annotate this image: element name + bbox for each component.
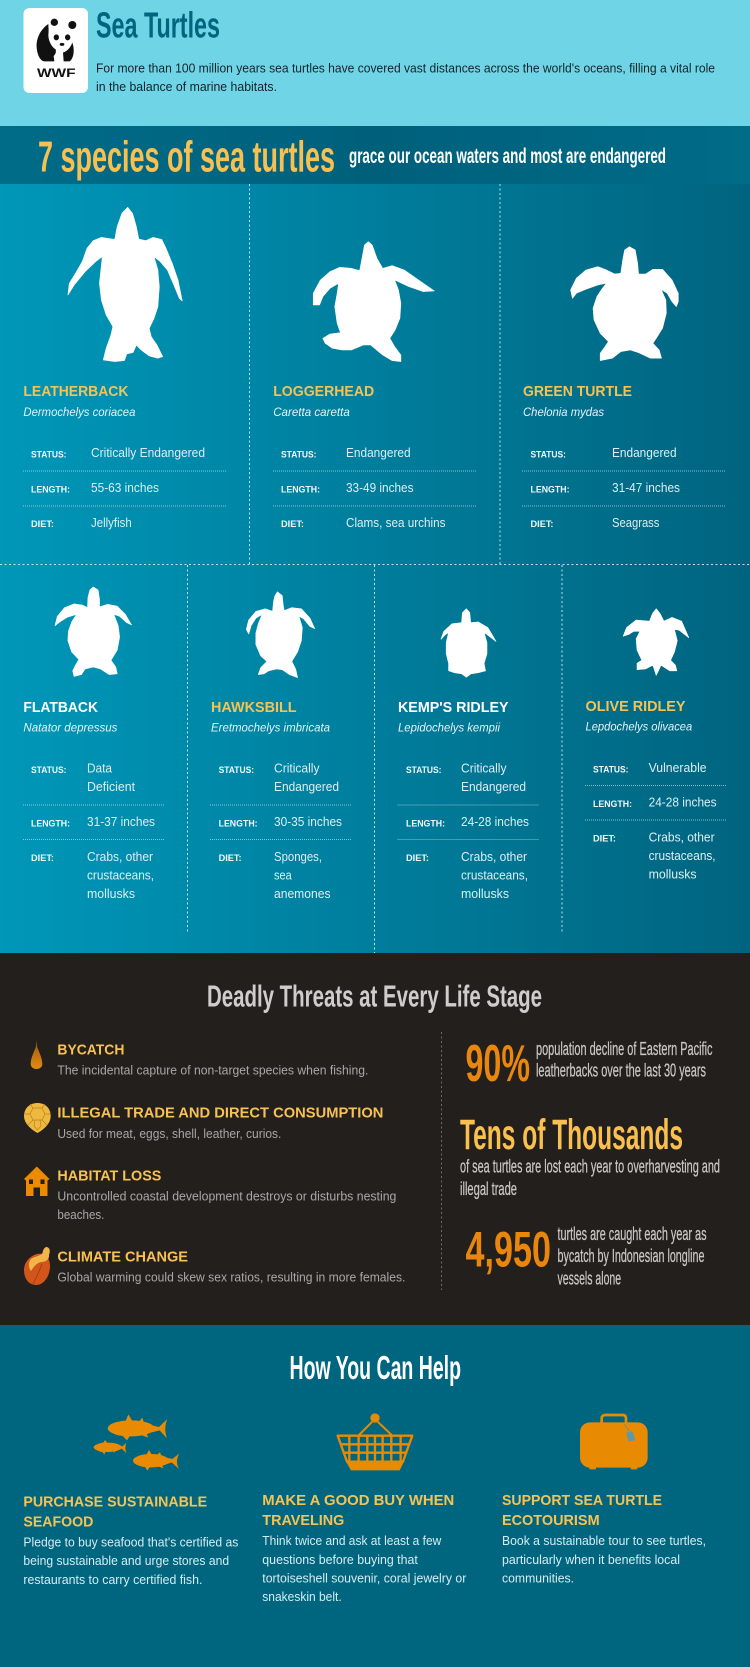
panel: olive ridley: OLIVE RIDLEY [586,698,686,715]
panel: hawksbill: STATUS: [219,765,254,776]
panel: leatherback: STATUS: [31,450,66,460]
panel: green turtle: Endangered [612,445,677,460]
panel: hawksbill: DIET: [219,853,242,864]
panel: hawksbill: Sponges, [274,849,322,864]
panel: olive ridley: Vulnerable [649,760,707,775]
panel: kemp's ridley: 24-28 inches [461,814,529,829]
intro text: in the balance of marine habitats. [96,79,277,94]
panel: leatherback: LEATHERBACK [23,383,129,400]
panel: header [0,0,750,126]
icon: green turtle silhouette [571,247,678,361]
panel: kemp's ridley: KEMP'S RIDLEY [398,699,508,716]
panel: leatherback: Dermochelys coriacea [23,405,136,419]
panel: green turtle: STATUS: [530,450,566,460]
stat: 90 percent: 90% [466,1035,530,1093]
panel: flatback: STATUS: [31,765,66,776]
intro text [96,60,715,94]
panel: loggerhead [273,242,476,530]
icon: net [31,1040,42,1069]
help: ecotourism: ECOTOURISM [502,1512,600,1529]
panel: hawksbill: anemones [274,886,331,901]
threat: habitat loss: Uncontrolled coastal development destroys or disturbs nesting [57,1190,396,1204]
panel: hawksbill: LENGTH: [219,818,258,830]
icon: WWF panda logo [24,8,88,93]
icon: fish [94,1414,179,1470]
heading: deadly threats: Deadly Threats at Every Life Stage [207,978,542,1014]
panel: loggerhead: Clams, sea urchins [346,515,446,530]
threat: illegal trade [24,1103,383,1141]
help: good buy: tortoiseshell souvenir, coral jewelry or [262,1571,467,1586]
panel: olive ridley [585,609,727,882]
panel: flatback: LENGTH: [31,818,70,830]
icon: loggerhead silhouette [313,242,434,362]
help: good buy [262,1413,467,1604]
panel: species background [0,184,750,953]
panel: hawksbill: sea [274,868,292,882]
stat: 90 percent [466,1035,712,1093]
threat: illegal trade: Used for meat, eggs, shell, leather, curios. [57,1127,281,1141]
panel: flatback: Natator depressus [23,720,117,734]
panel: green turtle [522,247,726,530]
panel: olive ridley: mollusks [649,866,697,882]
help: ecotourism [502,1415,706,1586]
panel: hawksbill [210,592,351,901]
icon: warming egg [24,1247,50,1285]
threat: climate change [24,1247,405,1285]
panel: hawksbill: Critically [274,760,320,776]
threat: climate change: CLIMATE CHANGE [57,1248,188,1266]
panel: deadly threats [0,953,750,1325]
icon: hawksbill silhouette [246,592,315,678]
threat: bycatch [31,1040,368,1078]
panel: olive ridley: crustaceans, [649,848,716,863]
panel: kemp's ridley: crustaceans, [461,868,528,882]
threat: illegal trade: ILLEGAL TRADE AND DIRECT CONSUMPTION [57,1104,383,1122]
stat: 4,950 [466,1222,706,1288]
panel: green turtle: LENGTH: [530,484,570,496]
panel: green turtle: GREEN TURTLE [523,383,632,400]
help: ecotourism: communities. [502,1571,574,1586]
panel: flatback: FLATBACK [23,699,98,716]
stat: 4,950: 4,950 [466,1222,551,1278]
icon: turtle shell [24,1103,51,1133]
panel: leatherback: Jellyfish [91,515,132,530]
title: Sea Turtles [96,4,220,46]
panel: kemp's ridley: Endangered [461,779,526,794]
panel: olive ridley: Lepdochelys olivacea [586,720,692,734]
panel: flatback: mollusks [87,886,135,901]
panel: kemp's ridley: LENGTH: [406,818,445,830]
panel: green turtle: DIET: [530,519,554,530]
help: good buy: MAKE A GOOD BUY WHEN [262,1492,454,1509]
panel: kemp's ridley: Crabs, other [461,849,528,864]
panel: flatback [23,587,164,901]
panel: flatback: crustaceans, [87,868,154,882]
panel: flatback: DIET: [31,853,54,864]
panel: how you can help [0,1325,750,1667]
threat: habitat loss [24,1166,396,1222]
intro text: For more than 100 million years sea turtles have covered vast distances across the world's oceans, filling a vital role [96,60,715,76]
help: ecotourism: particularly when it benefits local [502,1552,680,1567]
panel: loggerhead: LOGGERHEAD [273,383,374,400]
panel: green turtle: Seagrass [612,515,660,530]
panel: kemp's ridley [398,609,539,901]
panel: leatherback: DIET: [31,519,54,530]
help: seafood: restaurants to carry certified fish. [23,1572,202,1587]
panel: hawksbill: 30-35 inches [274,814,342,829]
threat: habitat loss: beaches. [57,1208,104,1222]
icon: WWF panda logo: WWF [37,68,76,80]
help: seafood: PURCHASE SUSTAINABLE [23,1494,207,1510]
icon: flatback silhouette [55,587,132,676]
stat: tens of thousands [460,1111,720,1199]
threat: bycatch: BYCATCH [57,1042,124,1058]
stat: tens of thousands: illegal trade [460,1179,517,1199]
help: seafood: being sustainable and urge stores and [23,1553,229,1568]
panel: loggerhead: 33-49 inches [346,480,414,495]
icon: basket [338,1413,412,1470]
help: good buy: Think twice and ask at least a few [262,1533,442,1548]
panel: flatback: Crabs, other [87,849,154,864]
panel: loggerhead: LENGTH: [281,484,320,496]
stat: 4,950: vessels alone [558,1268,621,1288]
panel: flatback: 31-37 inches [87,814,155,829]
heading: 7 species: 7 species of sea turtles [38,132,335,182]
panel: olive ridley: Crabs, other [649,830,715,844]
help: good buy: snakeskin belt. [262,1589,342,1604]
panel: olive ridley: 24-28 inches [649,794,717,810]
help: seafood [23,1414,239,1587]
heading: how you can help: How You Can Help [290,1349,461,1386]
panel: loggerhead: DIET: [281,519,304,530]
icon: suitcase [580,1415,648,1469]
help: seafood: Pledge to buy seafood that's certified as [23,1534,239,1550]
help: ecotourism: Book a sustainable tour to see turtles, [502,1533,706,1548]
icon: olive ridley silhouette [623,609,689,675]
panel: olive ridley: LENGTH: [593,799,632,810]
help: good buy: questions before buying that [262,1552,418,1567]
panel: loggerhead: Endangered [346,445,411,460]
panel: loggerhead: STATUS: [281,450,316,460]
panel: leatherback [23,207,226,530]
panel: leatherback: 55-63 inches [91,480,159,495]
panel: hawksbill: Eretmochelys imbricata [211,720,330,734]
panel: olive ridley: DIET: [593,834,616,844]
panel: olive ridley: STATUS: [593,764,628,776]
panel: green turtle: 31-47 inches [612,480,680,495]
threat: habitat loss: HABITAT LOSS [57,1168,161,1184]
panel: leatherback: LENGTH: [31,484,70,496]
panel: kemp's ridley: DIET: [406,853,429,864]
panel: species banner [0,126,750,184]
panel: flatback: Deficient [87,779,135,794]
panel: hawksbill: HAWKSBILL [211,699,297,716]
panel: green turtle: Chelonia mydas [523,405,604,419]
panel: kemp's ridley: Lepidochelys kempii [398,720,500,734]
panel: kemp's ridley: STATUS: [406,765,442,776]
panel: flatback: Data [87,760,113,776]
panel: hawksbill: Endangered [274,779,339,794]
help: ecotourism: SUPPORT SEA TURTLE [502,1492,662,1509]
help: good buy: TRAVELING [262,1512,344,1529]
icon: house [24,1166,50,1196]
panel: loggerhead: Caretta caretta [273,405,350,419]
icon: kemp's ridley silhouette [441,609,496,677]
threat: climate change: Global warming could skew sex ratios, resulting in more females. [57,1270,405,1284]
icon: leatherback silhouette [68,207,182,362]
panel: leatherback: Critically Endangered [91,445,205,460]
threat: bycatch: The incidental capture of non-target species when fishing. [57,1064,368,1078]
help: seafood: SEAFOOD [23,1514,94,1530]
panel: kemp's ridley: Critically [461,760,507,776]
panel: kemp's ridley: mollusks [461,886,509,901]
